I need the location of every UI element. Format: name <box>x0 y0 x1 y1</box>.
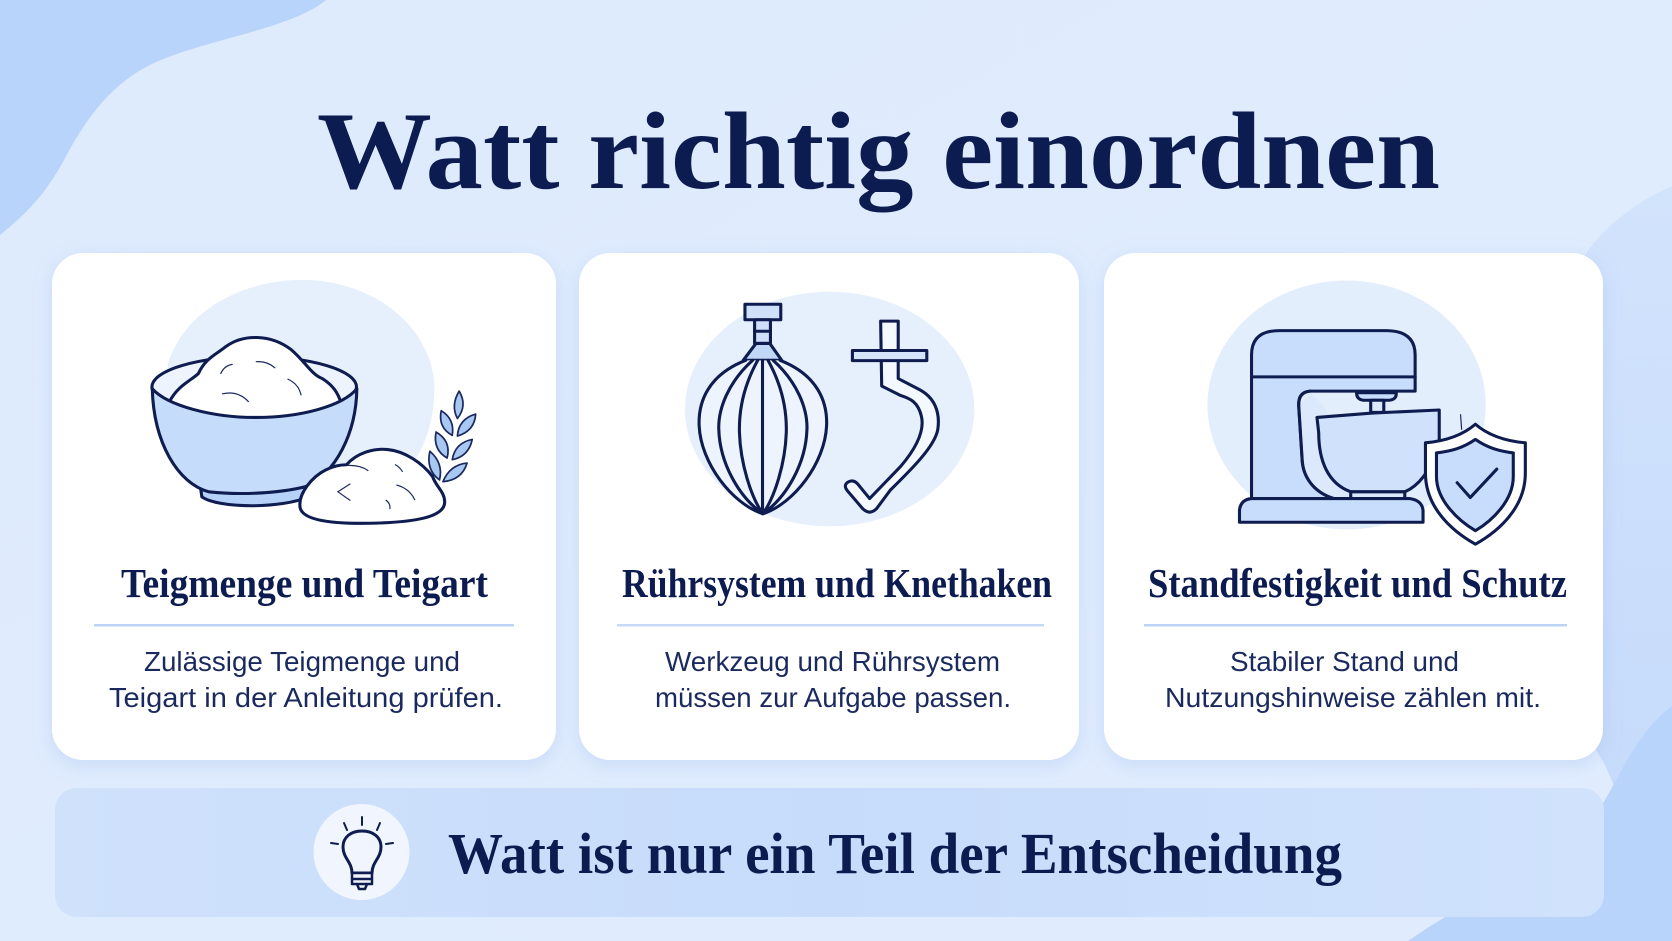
description: Zulässige Teigmenge und <box>144 646 460 677</box>
panel: Rührsystem und Knethaken <box>579 253 1079 760</box>
description <box>655 646 1011 713</box>
icon: bowl with flour and wheat <box>152 280 476 523</box>
description: Nutzungshinweise zählen mit. <box>1165 682 1541 713</box>
background blob: right <box>1585 186 1672 800</box>
icon: light bulb <box>314 804 410 900</box>
card background <box>1104 253 1603 760</box>
banner text: Watt ist nur ein Teil der Entscheidung <box>448 821 1342 886</box>
description: Stabiler Stand und <box>1230 646 1459 677</box>
card background <box>579 253 1079 760</box>
description: müssen zur Aufgabe passen. <box>655 682 1011 713</box>
heading: Teigmenge und Teigart <box>121 560 488 606</box>
description: Werkzeug und Rührsystem <box>665 646 1000 677</box>
background blob: bottom right <box>1408 706 1672 941</box>
background blob: top left <box>0 0 326 235</box>
icon: whisk and dough hook <box>685 292 974 526</box>
title: Watt richtig einordnen <box>317 90 1440 212</box>
panel: Teigmenge und Teigart <box>52 253 556 760</box>
heading: Rührsystem und Knethaken <box>622 560 1052 606</box>
description <box>1165 646 1541 713</box>
banner background <box>55 788 1604 917</box>
callout banner <box>55 788 1604 917</box>
panel: Standfestigkeit und Schutz <box>1104 253 1603 760</box>
description <box>109 646 503 713</box>
icon: stand mixer with shield <box>1207 281 1525 544</box>
heading: Standfestigkeit und Schutz <box>1148 560 1567 606</box>
card background <box>52 253 556 760</box>
description: Teigart in der Anleitung prüfen. <box>109 682 503 713</box>
